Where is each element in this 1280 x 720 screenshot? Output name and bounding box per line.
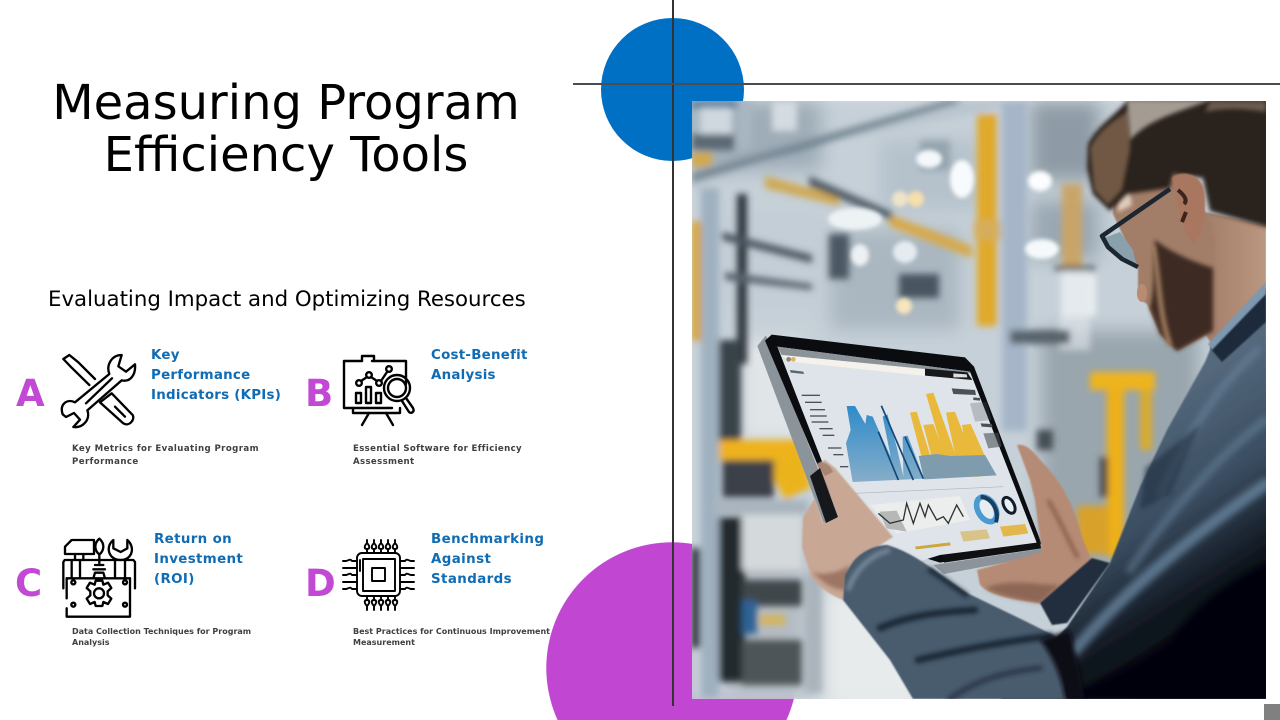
jacket highlights <box>1075 350 1266 650</box>
tablet screen <box>777 347 1037 568</box>
tablet silver bottom edge <box>933 549 1044 574</box>
dark bar lines <box>878 406 923 480</box>
title <box>52 75 520 183</box>
jacket shadow <box>1060 560 1270 700</box>
factory background <box>680 90 1280 710</box>
tablet <box>757 335 1044 574</box>
heading: Return on <box>154 532 232 547</box>
axis and divider <box>855 487 1003 493</box>
donut charts <box>972 493 1001 525</box>
heading: Performance <box>151 368 250 383</box>
heading: Against <box>431 552 491 567</box>
item D: Benchmarking Against Standards <box>305 532 550 647</box>
heading: Standards <box>431 572 512 587</box>
man's head and neck <box>1087 98 1270 351</box>
right side of background <box>1107 372 1124 557</box>
vertical rule <box>672 0 674 706</box>
description <box>72 444 259 467</box>
heading: Cost-Benefit <box>431 348 528 363</box>
yellow bracket <box>719 440 805 460</box>
sleeve folds <box>880 570 1050 699</box>
heading: Indicators (KPIs) <box>151 388 281 403</box>
blurred beams and columns <box>692 99 1155 699</box>
yellow bars <box>910 393 987 477</box>
line chart <box>870 496 970 533</box>
photo: engineer with tablet in a factory <box>692 101 1266 699</box>
description: Key Metrics for Evaluating Program <box>72 444 259 454</box>
man's jacket <box>1000 282 1270 700</box>
item C: Return on Investment <box>15 532 251 647</box>
beard <box>1150 240 1213 351</box>
icon: crossed screwdriver and wrench <box>60 354 136 428</box>
heading <box>431 348 528 383</box>
description: Best Practices for Continuous Improvement <box>353 627 550 636</box>
letter C: C <box>15 562 42 605</box>
icon: presentation board with chart and magnifier <box>342 354 415 426</box>
letter B: B <box>305 372 333 415</box>
right cuff <box>1040 558 1110 625</box>
description: Analysis <box>72 638 110 647</box>
palm and thumb <box>977 445 1092 603</box>
out-of-focus lights <box>828 150 1059 314</box>
left hand holding tablet <box>802 460 893 600</box>
purple circle <box>546 542 798 720</box>
description <box>353 627 550 647</box>
blue bars <box>846 406 924 482</box>
letter A: A <box>16 372 45 415</box>
jacket collar <box>1210 288 1266 362</box>
title: Measuring Program <box>52 75 520 131</box>
description: Data Collection Techniques for Program <box>72 627 251 636</box>
glasses <box>1102 189 1170 267</box>
tablet grey side edge <box>757 335 853 567</box>
title: Efficiency Tools <box>104 127 468 183</box>
bottom summary strips <box>1000 524 1028 537</box>
hair <box>1087 98 1270 228</box>
screen labels <box>802 388 1002 467</box>
letter D: D <box>305 562 336 605</box>
subtitle: Evaluating Impact and Optimizing Resources <box>48 287 526 312</box>
face <box>1113 170 1215 351</box>
tablet bezel <box>765 335 1042 563</box>
tablet edge between thumb and fingers <box>810 468 838 523</box>
heading <box>154 532 243 587</box>
horizontal rule <box>573 83 1280 85</box>
heading <box>431 532 544 587</box>
description <box>72 627 251 647</box>
heading: Benchmarking <box>431 532 544 547</box>
corner page marker <box>1264 704 1280 720</box>
item B: Cost-Benefit Analysis <box>305 348 528 467</box>
nose <box>1137 284 1147 302</box>
neck <box>1185 210 1266 345</box>
soft background tones <box>680 90 1280 710</box>
heading: (ROI) <box>154 572 195 587</box>
blue circle <box>601 18 744 161</box>
description: Performance <box>72 457 139 467</box>
heading: Investment <box>154 552 243 567</box>
sleeve of left arm <box>843 545 1085 699</box>
item A: Key Performance Indicators <box>16 348 281 467</box>
icon: microchip <box>342 539 415 611</box>
description: Assessment <box>353 457 414 467</box>
description <box>353 444 522 467</box>
right hand gripping tablet <box>977 445 1110 625</box>
jacket body <box>1000 288 1270 699</box>
heading: Key <box>151 348 180 363</box>
description: Measurement <box>353 638 415 647</box>
icon: toolbox with gear <box>62 538 136 618</box>
heading: Analysis <box>431 368 496 383</box>
ear <box>1172 174 1205 243</box>
description: Essential Software for Efficiency <box>353 444 522 454</box>
heading <box>151 348 281 403</box>
